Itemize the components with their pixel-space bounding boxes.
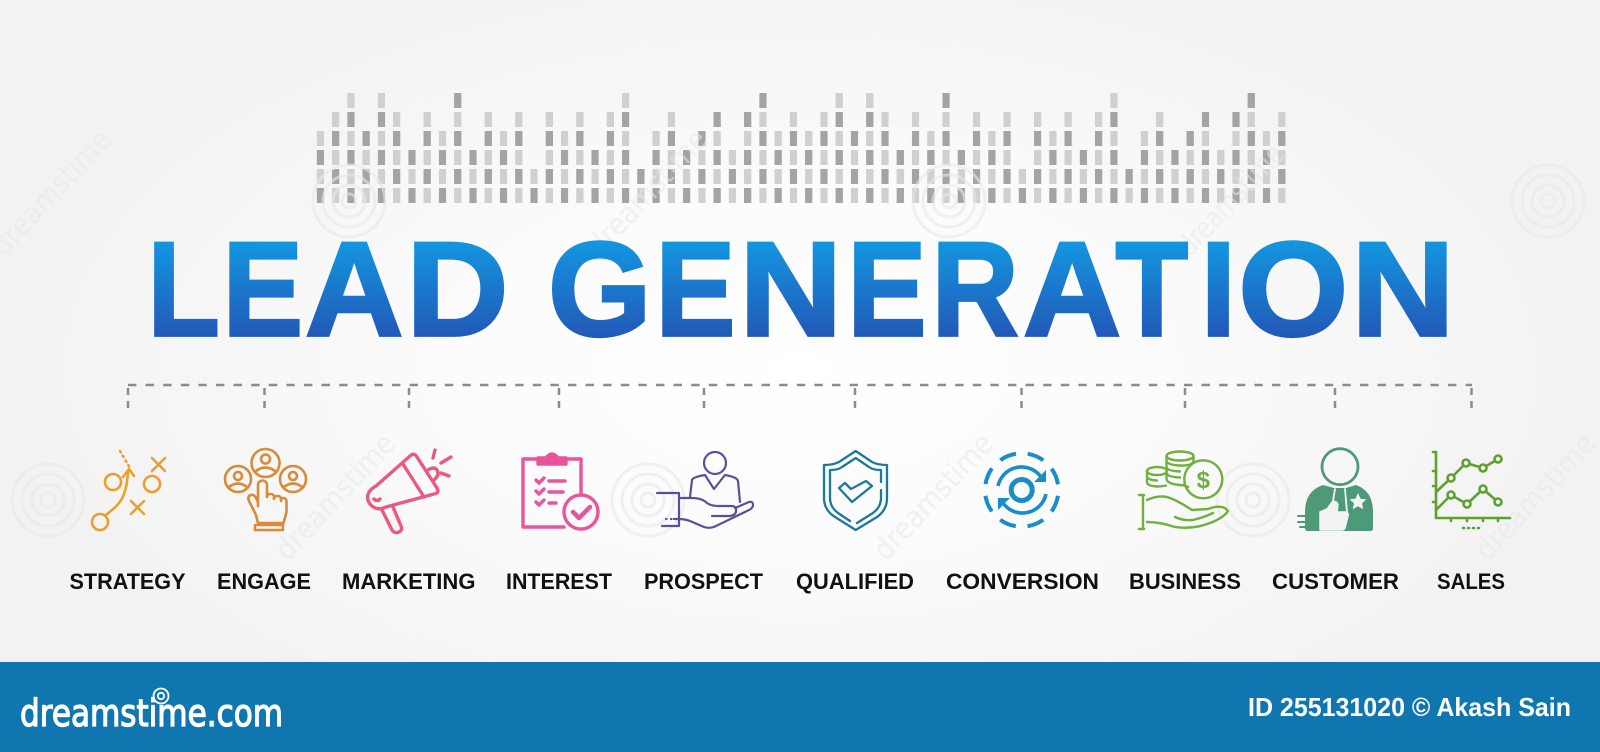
watermark text bbox=[0, 123, 1600, 567]
watermark spirals bbox=[12, 165, 1584, 536]
title: N bbox=[739, 214, 842, 364]
title: E bbox=[655, 214, 735, 364]
labels row: PROSPECT bbox=[644, 569, 764, 594]
labels row: QUALIFIED bbox=[796, 569, 914, 594]
title bbox=[147, 214, 1454, 364]
title: E bbox=[847, 214, 926, 364]
labels row: INTEREST bbox=[506, 569, 613, 594]
title: N bbox=[1351, 214, 1454, 364]
title: L bbox=[147, 214, 219, 364]
labels row: ENGAGE bbox=[217, 569, 311, 594]
labels row: CUSTOMER bbox=[1272, 569, 1399, 594]
icon: prospect bbox=[657, 452, 753, 528]
labels row: BUSINESS bbox=[1129, 569, 1241, 594]
watermark text: dreamstime bbox=[1170, 137, 1291, 263]
icon: strategy bbox=[92, 451, 165, 530]
title: I bbox=[1200, 214, 1235, 364]
title: O bbox=[1239, 214, 1348, 364]
labels row: STRATEGY bbox=[70, 569, 186, 594]
footer banner bbox=[0, 662, 1600, 752]
title: A bbox=[1023, 214, 1121, 364]
icon: interest clipboard bbox=[523, 454, 598, 529]
icon: sales line chart bbox=[1433, 452, 1510, 528]
title: R bbox=[932, 214, 1019, 364]
icon: qualified shield bbox=[824, 451, 887, 530]
equalizer bar pattern bbox=[317, 100, 1288, 196]
watermark text: dreamstime bbox=[580, 123, 715, 263]
dashed connector tree bbox=[128, 385, 1472, 408]
watermark text: dreamstime bbox=[866, 427, 1001, 567]
labels row: SALES bbox=[1437, 569, 1505, 594]
labels row bbox=[70, 569, 1505, 594]
icon: engage bbox=[225, 449, 306, 530]
title: A bbox=[305, 214, 403, 364]
banner logo spiral bbox=[154, 688, 168, 704]
title: D bbox=[406, 214, 509, 364]
icon: conversion cycle bbox=[985, 453, 1058, 527]
image credit: ID 255131020 © Akash Sain bbox=[1248, 692, 1571, 722]
labels row: MARKETING bbox=[342, 569, 476, 594]
icon: marketing megaphone bbox=[368, 450, 451, 533]
icon: customer bbox=[1298, 449, 1373, 531]
title: G bbox=[548, 214, 652, 364]
icon: business coins bbox=[1139, 452, 1228, 529]
watermark text: dreamstime bbox=[268, 427, 403, 567]
icon: business coins: $ bbox=[1197, 467, 1211, 494]
title: E bbox=[223, 214, 303, 364]
title: T bbox=[1116, 214, 1188, 364]
banner logo text: dreamstime.com bbox=[20, 692, 283, 735]
labels row: CONVERSION bbox=[946, 569, 1099, 594]
